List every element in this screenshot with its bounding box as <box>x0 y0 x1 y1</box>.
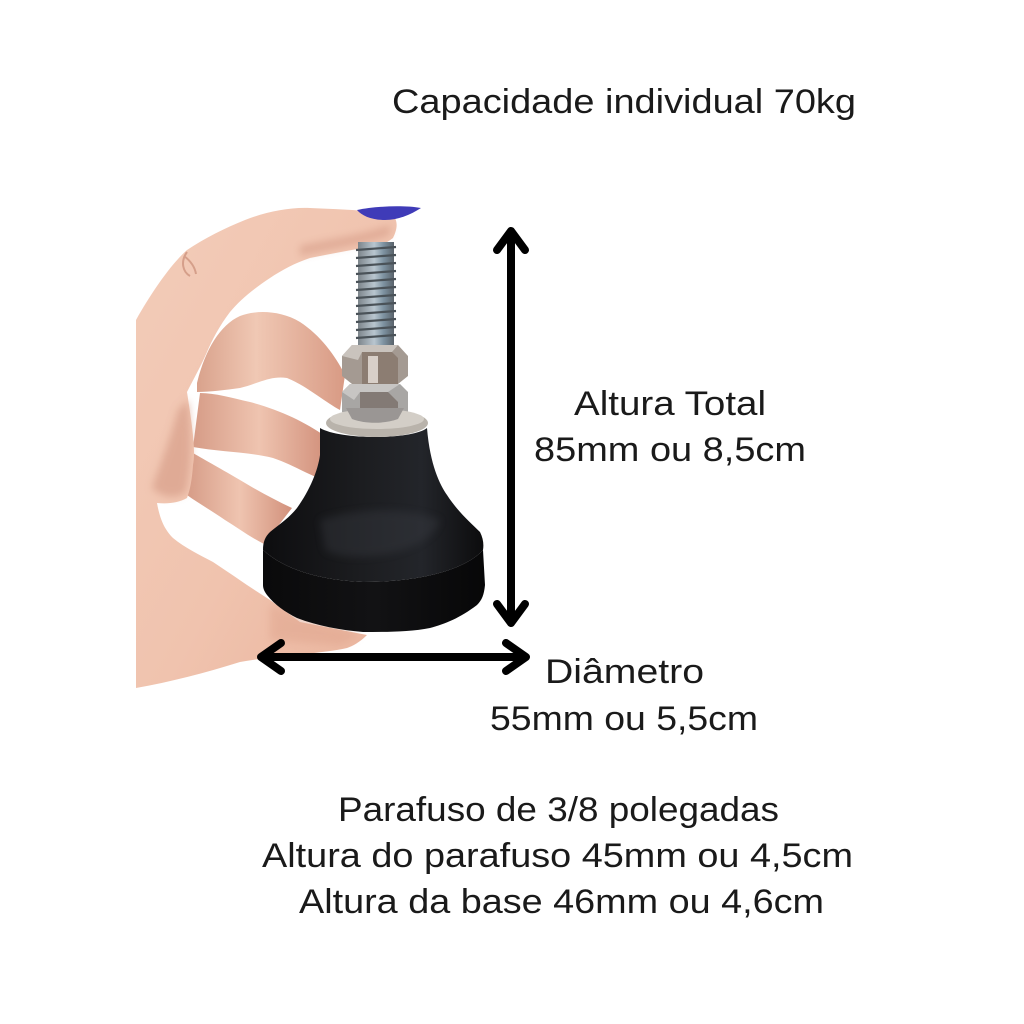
threaded bolt <box>358 242 394 352</box>
palm fold shadow <box>152 400 191 497</box>
bolt and base specifications: Parafuso de 3/8 polegadas <box>338 791 779 829</box>
lower nut <box>342 384 408 419</box>
diameter label <box>490 653 758 738</box>
total height label <box>534 385 806 469</box>
rubber highlights <box>320 511 440 557</box>
rubber base lower band <box>263 550 485 632</box>
fingertip shadow <box>300 225 390 256</box>
bolt and base specifications: Altura da base 46mm ou 4,6cm <box>299 883 824 921</box>
bolt threads <box>356 247 396 338</box>
knuckle crease <box>183 252 196 276</box>
rubber base upper body <box>263 428 483 582</box>
capacity heading: Capacidade individual 70kg <box>392 83 856 121</box>
thumb and palm shading <box>270 605 360 645</box>
fingernail <box>357 206 421 220</box>
total height label: Altura Total <box>574 385 766 423</box>
upper nut <box>342 345 408 384</box>
palm, index finger and thumb <box>136 208 397 688</box>
total height label: 85mm ou 8,5cm <box>534 431 806 469</box>
bolt and base specifications <box>262 791 853 921</box>
photo: hand holding leveling foot <box>136 206 485 688</box>
middle finger <box>197 312 345 410</box>
diameter label: 55mm ou 5,5cm <box>490 700 758 738</box>
horizontal diameter arrow <box>261 643 526 671</box>
ring finger <box>193 393 325 478</box>
lower nut base overlap <box>346 408 404 423</box>
little finger <box>187 453 292 544</box>
washer <box>326 409 428 437</box>
vertical height arrow <box>497 231 525 623</box>
diameter label: Diâmetro <box>545 653 704 691</box>
bolt and base specifications: Altura do parafuso 45mm ou 4,5cm <box>262 837 853 875</box>
